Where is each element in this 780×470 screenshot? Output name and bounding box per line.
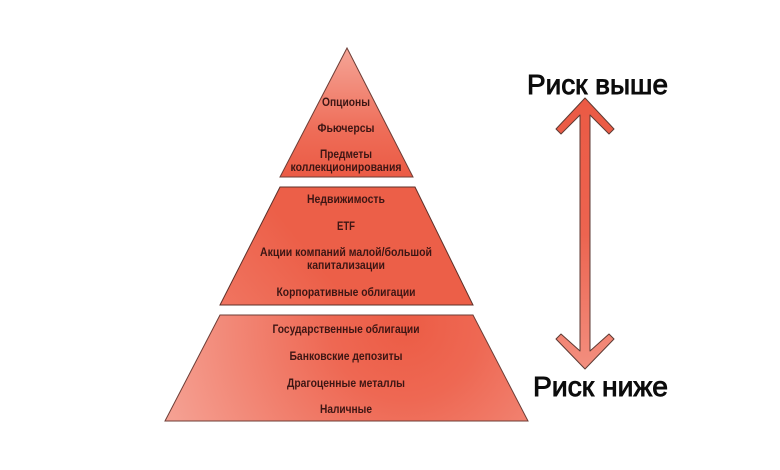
bottom tier labels: Банковские депозиты (290, 351, 403, 363)
panel: pyramid middle tier (220, 187, 473, 305)
middle tier labels: Акции компаний малой/большой (260, 247, 432, 259)
middle tier labels: капитализации (307, 260, 385, 272)
middle tier labels: Корпоративные облигации (276, 287, 416, 299)
bottom tier trapezoid (165, 315, 528, 421)
bottom tier labels: Наличные (320, 404, 372, 416)
heading: higher risk: Риск выше (527, 69, 668, 100)
middle tier labels: ETF (337, 221, 355, 233)
top tier triangle (280, 48, 413, 177)
arrow: double-headed risk scale (556, 98, 614, 369)
panel: pyramid bottom tier (165, 315, 528, 421)
middle tier labels (260, 194, 432, 299)
bottom tier labels: Драгоценные металлы (287, 378, 405, 390)
top tier labels (290, 97, 402, 174)
top tier labels: Опционы (322, 97, 370, 109)
top tier labels: коллекционирования (290, 162, 402, 174)
bottom tier labels: Государственные облигации (272, 324, 420, 336)
middle tier trapezoid (220, 187, 473, 305)
top tier labels: Фьючерсы (318, 123, 375, 135)
top tier labels: Предметы (320, 149, 372, 161)
panel: pyramid top tier (280, 48, 413, 177)
bottom tier labels (272, 324, 420, 416)
heading: lower risk: Риск ниже (533, 371, 668, 402)
middle tier labels: Недвижимость (307, 194, 385, 206)
